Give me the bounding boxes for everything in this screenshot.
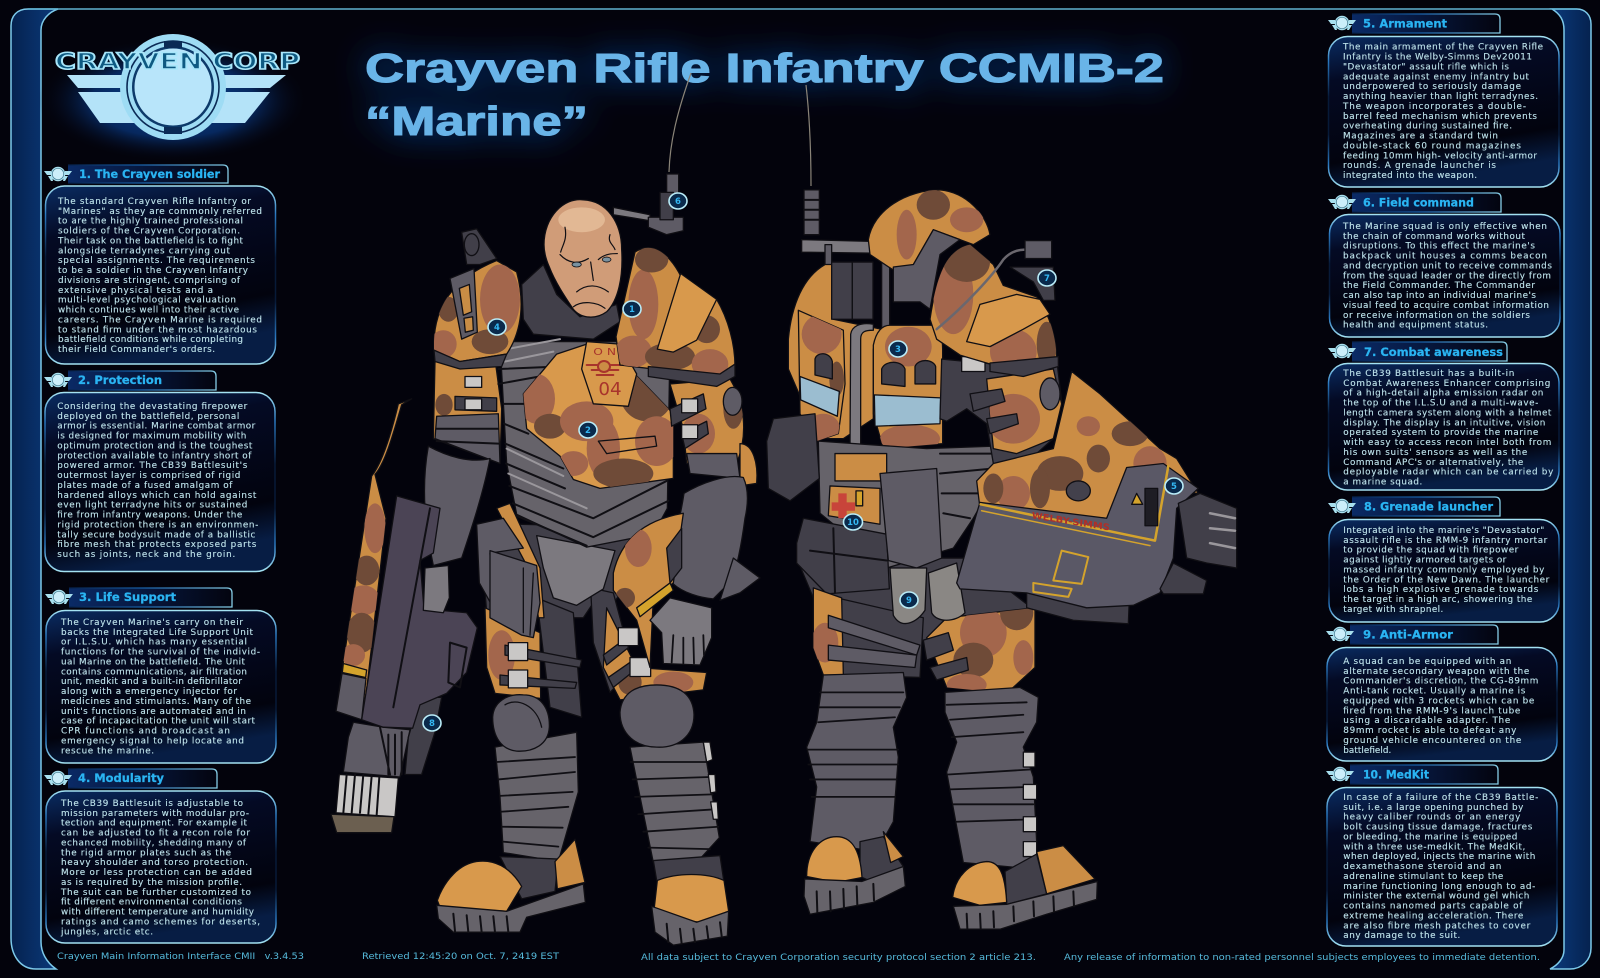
text block 8: lobs a high explosive grenade towards (1343, 585, 1539, 595)
marker 1: 1 (629, 305, 635, 315)
marker 3 (889, 341, 907, 357)
rifle at hip: WELBY-SIMMS (1031, 510, 1110, 533)
text block 2: fibre mesh that protects exposed parts (57, 540, 257, 550)
text block 3: case of incapacitation the unit will start (61, 717, 256, 727)
text block 1: to be a soldier in the Crayven Infantry (58, 266, 248, 276)
text block 5: adequate against enemy infantry but (1343, 72, 1530, 82)
text block 4: jungles, arctic etc. (60, 927, 153, 937)
text block 1: The standard Crayven Rifle Infantry or (57, 197, 251, 207)
text block 10: or bleeding, the marine is equipped (1343, 832, 1517, 842)
left life-support tank (798, 310, 845, 444)
text block 7: display. The display is an intuitive, vision (1343, 418, 1545, 428)
text block 6: backpack unit houses a comms beacon (1343, 252, 1547, 262)
left thigh (812, 588, 923, 677)
heading 4: 4. Modularity (78, 771, 164, 785)
heading 8: 8. Grenade launcher (1364, 500, 1493, 514)
footer: security notice: All data subject to Crayven Corporation security protocol section 2 article 213. (641, 953, 1036, 963)
text block 8: Integrated into the marine's "Devastator" (1343, 526, 1544, 536)
text block 9: equipped with 3 rockets which can be (1343, 696, 1534, 706)
marker 5 (1165, 478, 1183, 494)
text block 10: dexamethasone steroid and an (1343, 862, 1501, 872)
marker 7 (1038, 270, 1056, 286)
text block 2: such as joints, neck and the groin. (57, 550, 235, 560)
text block 7: a marine squad. (1343, 478, 1422, 488)
panel: 6. Field command (1328, 193, 1560, 337)
tube (850, 324, 873, 449)
heading 2 (44, 371, 216, 390)
text block 5: Magazines are a standard twin (1343, 132, 1498, 142)
marker 8: 8 (429, 719, 435, 729)
marker 9 (900, 592, 918, 608)
text block 2: Considering the devastating firepower (57, 402, 248, 412)
text block 7: length camera system along with a helmet (1343, 408, 1552, 418)
text block 2: even light terradyne hits or sustained (57, 501, 247, 511)
marker 8 (423, 715, 441, 731)
heading 9 (1326, 625, 1498, 644)
text block 6: the chain of command works without (1343, 232, 1526, 242)
text block 5: overheating during sustained fire. (1343, 122, 1512, 132)
text block 7: operated system to provide the marine (1343, 428, 1538, 438)
heading 3 (45, 588, 232, 607)
text block 2: plates made of a fused amalgam of (57, 481, 233, 491)
marker 2: 2 (585, 426, 591, 436)
text block 5: double-stack 60 round magazines (1343, 141, 1521, 151)
text block 3: functions for the survival of the individ- (61, 648, 260, 658)
panel: 4. Modularity (44, 769, 276, 943)
title (365, 45, 1164, 144)
heading 10: 10. MedKit (1363, 768, 1429, 782)
lower torso base (797, 558, 1035, 643)
shoulder camera (462, 229, 497, 265)
text block 9: using a discardable adapter. The (1343, 716, 1510, 726)
marker 6: 6 (675, 197, 681, 207)
chest plate (518, 344, 678, 488)
text block 7: Combat Awareness Enhancer comprising (1343, 379, 1550, 389)
panel: 9. Anti-Armor (1326, 625, 1557, 761)
text block 2: deployed on the battlefield, personal (57, 412, 239, 422)
text block 5: anything heavier than light terradynes. (1343, 92, 1538, 102)
text block 1: extensive physical tests and a (58, 286, 213, 296)
left shoulder armor (430, 261, 521, 369)
lower body base (480, 523, 673, 618)
text block 1: alongside terradynes carrying out (58, 246, 231, 256)
text block 3: backs the Integrated Life Support Unit (61, 628, 254, 638)
text block 9: ground vehicle encountered on the (1343, 736, 1521, 746)
heading 2: 2. Protection (78, 373, 162, 387)
text block 2: rigid protection there is an environmen- (57, 520, 258, 530)
text block 4: with different temperature and humidity (61, 908, 254, 918)
text block 4: echanced mobility, shedding many of (61, 838, 247, 848)
text block 1: battlefield conditions while completing (58, 335, 243, 345)
text block 2: armor is essential. Marine combat armor (57, 422, 256, 432)
text block 1: "Marines" as they are commonly referred (58, 207, 262, 217)
marker 5: 5 (1171, 482, 1177, 492)
text block 1: their Field Commander's orders. (58, 345, 215, 355)
text block 5: integrated into the weapon. (1343, 171, 1477, 181)
text block 1: Their task on the battlefield is to fight (57, 236, 244, 246)
antenna: front (669, 73, 691, 172)
right forearm (672, 477, 747, 599)
text block 10: marine functioning long enough to ad- (1343, 882, 1535, 892)
marker 9: 9 (906, 596, 912, 606)
text block 3: rescue the marine. (61, 746, 154, 756)
head (544, 200, 622, 317)
text block 10: adrenaline stimulant to keep the (1343, 872, 1503, 882)
back boots (804, 832, 1097, 929)
text block 1: divisions are stringent, comprising of (58, 276, 241, 286)
text block 10: when deployed, injects the marine with (1343, 852, 1535, 862)
text block 9: A squad can be equipped with an (1343, 657, 1511, 667)
marker 6 (669, 193, 687, 209)
heading 6: 6. Field command (1363, 196, 1474, 210)
text block 1: careers. The Crayven Marine is required (58, 315, 262, 325)
text block 4: mission parameters with modular pro- (61, 809, 249, 819)
footer: version: Crayven Main Information Interface CMII v.3.4.53 (57, 952, 304, 962)
marker 10 (844, 514, 862, 530)
heading 1: 1. The Crayven soldier (79, 167, 220, 181)
text block 1: special assignments. The requirements (58, 256, 255, 266)
panel: 2. Protection (44, 371, 275, 572)
text block 3: The Crayven Marine's carry on their (60, 618, 243, 628)
pouch on back (832, 262, 873, 319)
camera and cable (937, 241, 1055, 329)
text block 6: and decryption unit to receive commands (1343, 262, 1552, 272)
medkit (828, 454, 887, 524)
text block 3: or I.L.S.U. which has many essential (61, 638, 247, 648)
logo: Crayven Corp: CRAYVEN CORP (55, 50, 300, 75)
text block 5: The weapon incorporates a double- (1342, 102, 1526, 112)
chest badge 04: O N (593, 346, 616, 357)
text block 2: optimum protection and is the toughest (57, 442, 253, 452)
back helmet dome (868, 190, 990, 309)
text block 7: The CB39 Battlesuit has a built-in (1342, 369, 1514, 379)
heading 7 (1328, 342, 1507, 361)
text block 1: to stand firm under the most hazardous (58, 325, 257, 335)
heading 7: 7. Combat awareness (1364, 345, 1503, 359)
panel: 1. The Crayven soldier (44, 165, 276, 364)
chest badge 04 (582, 342, 637, 406)
antenna unit and frame (802, 190, 900, 329)
text block 3: emergency signal to help locate and (61, 736, 244, 746)
antenna: back (806, 85, 811, 186)
text block 2: fire from infantry weapons. Under the (57, 511, 242, 521)
text block 8: the Order of the New Dawn. The launcher (1343, 575, 1550, 585)
text block 10: extreme healing acceleration. There (1343, 911, 1523, 921)
text block 3: medicines and stimulants. Many of the (61, 697, 251, 707)
text block 6: the Field Commander. The Commander (1343, 281, 1535, 291)
text block 9: battlefield. (1343, 746, 1391, 756)
heading 4 (44, 769, 217, 788)
marker 1 (623, 301, 641, 317)
back legs (807, 672, 1038, 869)
text block 9: fired from the RMM-9's launch tube (1343, 706, 1520, 716)
heading 5 (1328, 14, 1500, 33)
text block 3: contains communications, air filtration (61, 667, 247, 677)
text block 4: fit different environmental conditions (61, 898, 242, 908)
text block 10: heavy caliber rounds or an energy (1343, 813, 1520, 823)
heading 8 (1328, 497, 1500, 516)
text block 10: contains nanomed parts capable of (1343, 902, 1523, 912)
heading 6 (1328, 193, 1501, 212)
text block 4: ratings and camo schemes for deserts, (61, 917, 260, 927)
footer: retrieved: Retrieved 12:45:20 on Oct. 7, 2419 EST (362, 952, 560, 962)
panel: 3. Life Support (45, 588, 276, 763)
heading 3: 3. Life Support (79, 590, 177, 604)
chest badge 04: 04 (598, 378, 622, 400)
text block 6: can also tap into an individual marine's (1343, 291, 1536, 301)
radio box (880, 469, 942, 568)
text block 3: unit, medkit and a built-in defibrillator (61, 677, 242, 687)
text block 3: unit's functions are automated and in (61, 707, 246, 717)
text block 8: to provide the squad with firepower (1343, 546, 1519, 556)
right arm upper (670, 379, 757, 486)
text block 2: powered armor. The CB39 Battlesuit's (57, 461, 248, 471)
text block 9: Commander's discretion, the CG-89mm (1343, 677, 1538, 687)
text block 4: The suit can be further customized to (60, 888, 251, 898)
marker 3: 3 (895, 345, 901, 355)
belt pouches (797, 518, 889, 594)
text block 1: multi-level psychological evaluation (58, 296, 236, 306)
torso back (818, 441, 1002, 568)
text block 8: target with shrapnel. (1343, 605, 1443, 615)
text block 6: visual feed to acquire combat information (1343, 301, 1549, 311)
text block 10: are also fibre mesh patches to cover (1343, 921, 1531, 931)
rifle at hip (957, 371, 1237, 624)
text block 10 (1343, 793, 1538, 941)
text block 5: barrel feed mechanism which prevents (1343, 112, 1537, 122)
heading 5: 5. Armament (1363, 16, 1448, 30)
side box (767, 414, 819, 501)
figure: marine back view (767, 190, 1237, 929)
marker 4: 4 (494, 323, 500, 333)
torso (477, 339, 670, 638)
text block 9: 89mm rocket is able to defeat any (1343, 726, 1516, 736)
text block 6: The Marine squad is only effective when (1342, 222, 1547, 232)
text block 3: along with a emergency injector for (61, 687, 237, 697)
text block 7: deployable radar which can be carried by (1343, 468, 1553, 478)
heading 1 (44, 165, 228, 183)
text block 9: alternate secondary weapon with the (1343, 667, 1529, 677)
text block 8: assault rifle is the RMM-9 infantry mortar (1343, 536, 1548, 546)
text block 10: suit, i.e. a large opening punched by (1343, 803, 1523, 813)
marker 7: 7 (1044, 274, 1050, 284)
neck collar (522, 265, 620, 339)
figure: marine front view (331, 174, 760, 945)
text block 4: The CB39 Battlesuit is adjustable to (60, 799, 243, 809)
text block 8: massed infantry commonly employed by (1343, 566, 1544, 576)
marker 10: 10 (847, 518, 859, 528)
text block 4: as is required by the mission profile. (61, 878, 242, 888)
right shoulder back (930, 242, 1058, 376)
text block 6 (1342, 222, 1552, 331)
logo: Crayven Corp (38, 34, 308, 162)
text block 5: "Devastator" assault rifle which is (1343, 62, 1509, 72)
rifle (331, 399, 477, 833)
heading 10 (1326, 765, 1498, 784)
right thigh (922, 608, 1036, 690)
text block 6: disruptions. To this effect the marine's (1343, 242, 1535, 252)
text block 8: the target in a high arc, showering the (1343, 595, 1532, 605)
text block 5: feeding 10mm high- velocity anti-armor (1343, 151, 1537, 161)
left leg (437, 598, 585, 932)
text block 5 (1342, 43, 1543, 181)
text block 4: can be adjusted to fit a recon role for (61, 829, 250, 839)
text block 2 (57, 402, 258, 560)
panel: 8. Grenade launcher (1328, 497, 1559, 622)
text block 5: Infantry is the Welby-Simms Dev20011 (1343, 53, 1532, 63)
text block 7: of a high-detail alpha emission radar on (1343, 389, 1543, 399)
gloved hand (650, 598, 712, 665)
panel: 7. Combat awareness (1328, 342, 1559, 490)
text block 3: ual Marine on the battlefield. The Unit (61, 658, 246, 668)
footer: release notice: Any release of information to non-rated personnel subjects employees to immediate detention. (1064, 953, 1540, 963)
marker 2 (579, 422, 597, 438)
rockets (890, 563, 965, 624)
text block 9: Anti-tank rocket. Usually a marine is (1343, 687, 1526, 697)
text block 4: the rigid armor plates such as the (61, 848, 231, 858)
right upper arm (940, 357, 1062, 469)
text block 7 (1342, 369, 1553, 488)
text block 3: CPR functions and broadcast an (61, 727, 230, 737)
title: “Marine” (365, 98, 588, 144)
helmet under arm (613, 513, 760, 668)
text block 7: the top of the I.L.S.U and a multi-wave- (1343, 399, 1538, 409)
text block 6: from the squad leader or the directly from (1343, 271, 1551, 281)
left forearm (424, 446, 490, 566)
text block 7: his own suits' sensors as well as the (1343, 448, 1527, 458)
text block 5: underpowered to seriously damage (1343, 82, 1521, 92)
text block 6: or receive information on the soldiers (1343, 311, 1530, 321)
heading 9: 9. Anti-Armor (1363, 628, 1453, 642)
text block 4: heavy shoulder and torso protection. (61, 858, 248, 868)
text block 10: any damage to the suit. (1343, 931, 1460, 941)
text block 2: tally secure bodysuit made of a ballistic (57, 530, 255, 540)
text block 4 (60, 799, 260, 937)
right life-support tank (873, 325, 943, 453)
text block 1 (57, 197, 262, 355)
right shoulder armor (615, 247, 735, 386)
backpack antenna unit (613, 174, 683, 235)
text block 2: protection available to infantry short of (57, 451, 252, 461)
text block 3 (60, 618, 260, 756)
text block 2: hardened alloys which can hold against (57, 491, 257, 501)
text block 4: tection and equipment. For example it (61, 819, 248, 829)
text block 5: rounds. A grenade launcher is (1343, 161, 1496, 171)
text block 1: soldiers of the Crayven Corporation. (58, 227, 240, 237)
text block 4: More or less protection can be added (61, 868, 252, 878)
text block 10: minister the external wound gel which (1343, 892, 1529, 902)
text block 10: bolt causing tissue damage, fractures (1343, 823, 1533, 833)
text block 7: Command APC's or alternatively, the (1343, 458, 1523, 468)
right leg (591, 588, 729, 945)
text block 7: with easy to access recon intel both from (1343, 438, 1551, 448)
marker 4 (488, 319, 506, 335)
text block 10: with a three use-medkit. The MedKit, (1343, 842, 1525, 852)
title: Crayven Rifle Infantry CCMIB-2 (365, 45, 1164, 91)
text block 9 (1343, 657, 1538, 756)
text block 8 (1343, 526, 1550, 615)
back shoulders base (788, 265, 882, 439)
text block 8: against lightly armored targets or (1343, 556, 1507, 566)
panel: 5. Armament (1328, 14, 1559, 187)
text block 10: In case of a failure of the CB39 Battle- (1343, 793, 1538, 803)
text block 1: to are the highly trained professional (58, 217, 243, 227)
text block 2: outermost layer is comprised of rigid (57, 471, 240, 481)
text block 1: which continues well into their active (58, 306, 239, 316)
text block 5: The main armament of the Crayven Rifle (1342, 43, 1543, 53)
text block 2: is designed for maximum mobility with (57, 432, 246, 442)
panel: 10. MedKit (1326, 765, 1557, 946)
left upper arm (433, 359, 502, 464)
text block 6: health and equipment status. (1343, 321, 1488, 331)
